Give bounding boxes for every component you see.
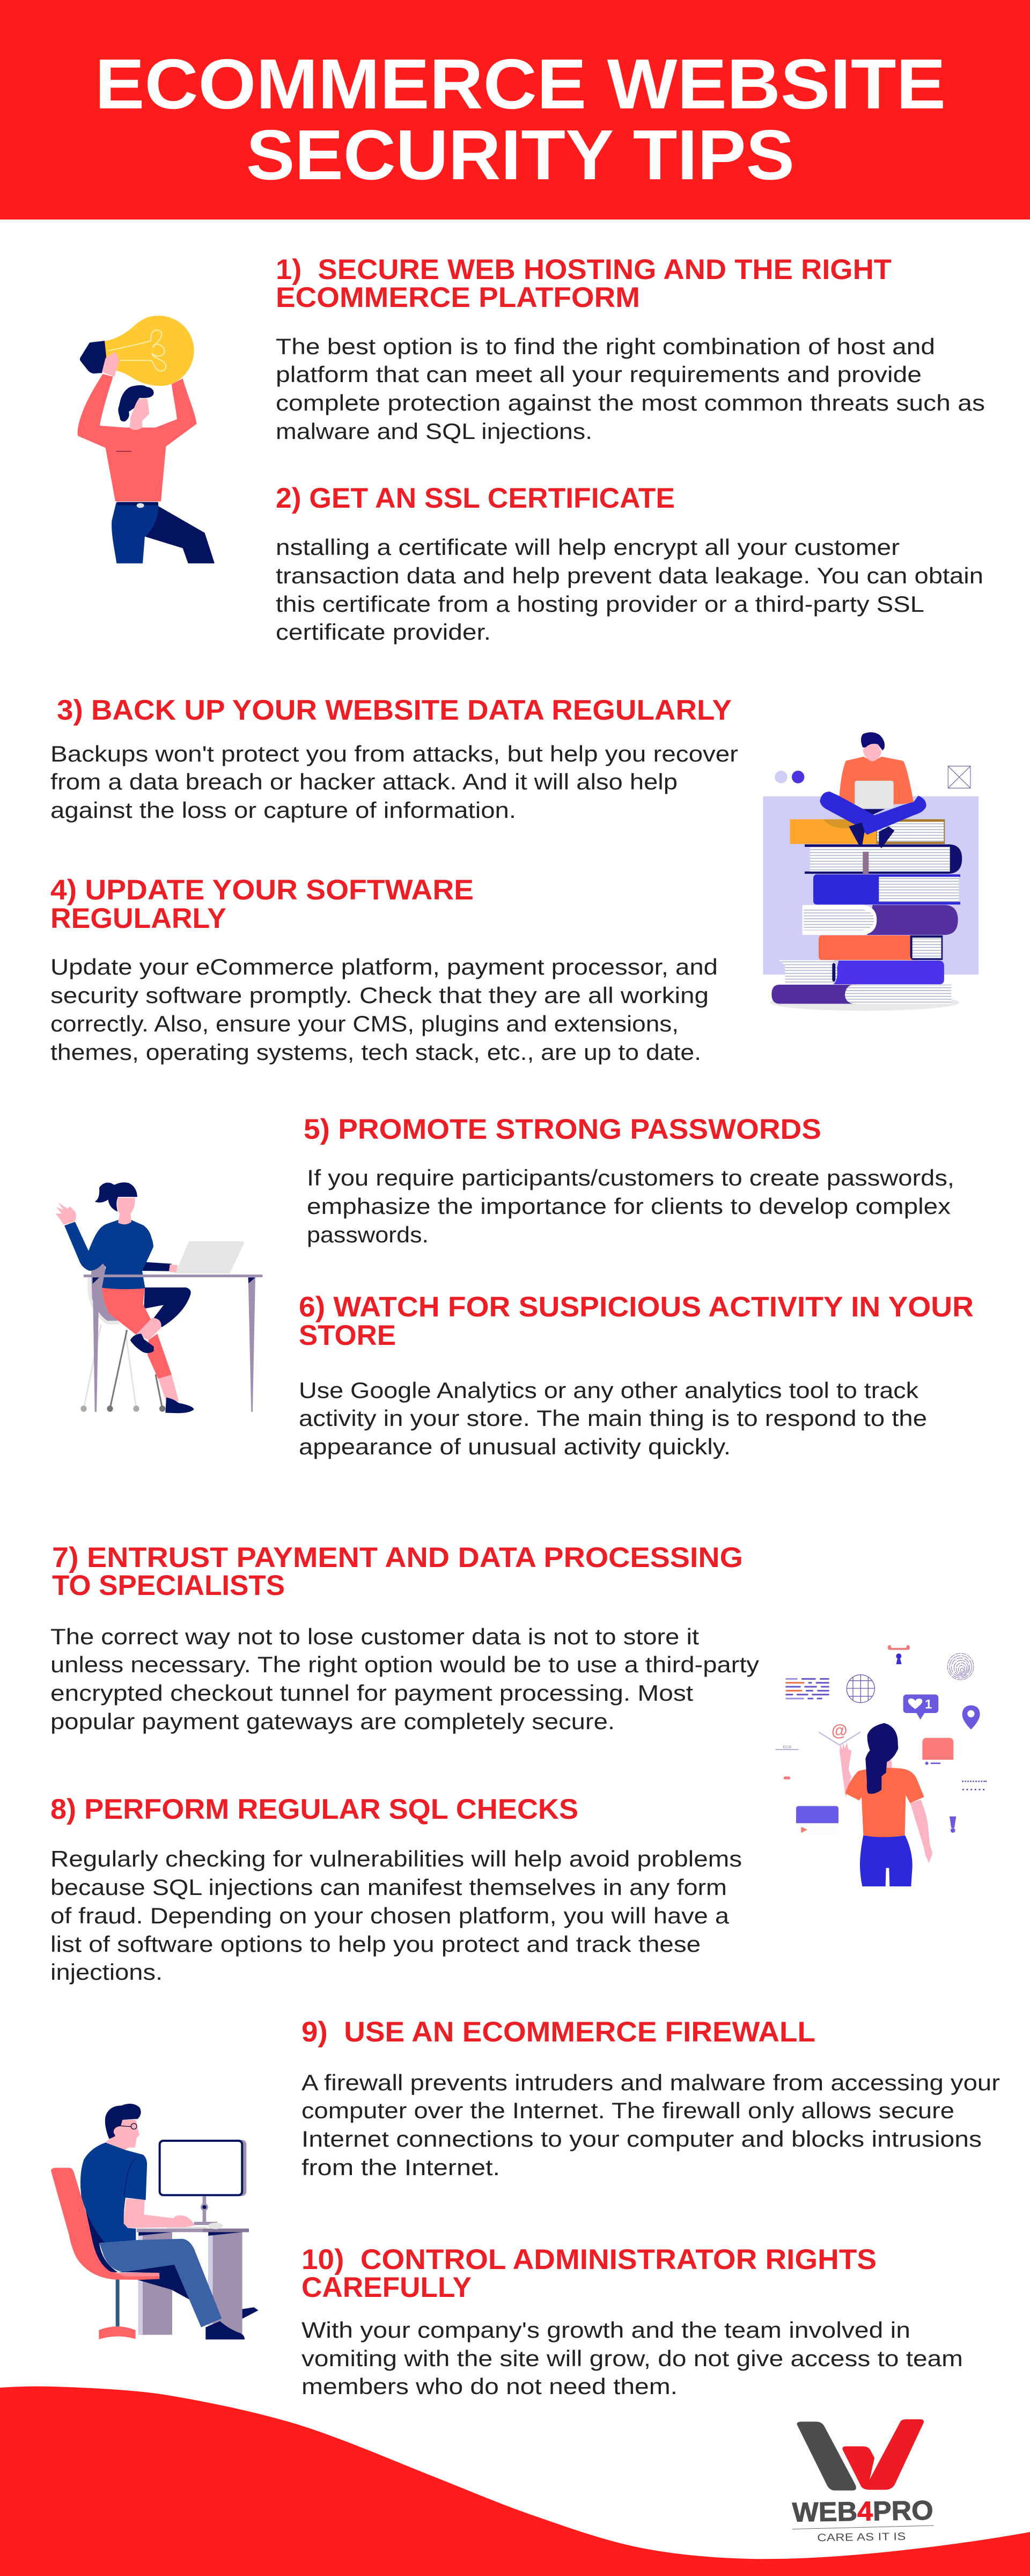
panel: tip 1 — [276, 254, 985, 444]
heading: tip 2: 2) GET AN SSL CERTIFICATE — [276, 482, 675, 514]
heading: tip 6 — [299, 1291, 974, 1351]
heading: tip 8: 8) PERFORM REGULAR SQL CHECKS — [50, 1794, 578, 1825]
panel: tip 4 — [50, 874, 718, 1065]
icon: password stars — [962, 1781, 987, 1790]
text: tip 4: themes, operating systems, tech stack, etc., are up to date. — [50, 1040, 701, 1065]
text: tip 1: malware and SQL injections. — [276, 419, 592, 444]
heading: tip 4: 4) UPDATE YOUR SOFTWARE — [50, 874, 474, 906]
icon: video card — [796, 1806, 838, 1836]
text: tip 8 — [50, 1846, 742, 1985]
text: tip 2 — [276, 535, 983, 645]
text: tip 4: correctly. Also, ensure your CMS, plugins and extensions, — [50, 1011, 679, 1036]
heading: tip 3: 3) BACK UP YOUR WEBSITE DATA REGULARLY — [57, 694, 732, 726]
text: tip 10: members who do not need them. — [301, 2374, 678, 2399]
logo wordmark: WEB4PRO — [792, 2495, 933, 2528]
icon: globe — [847, 1675, 874, 1703]
panel: tip 2 — [276, 482, 983, 645]
icon: fingerprint — [947, 1653, 974, 1680]
heading: tip 7: 7) ENTRUST PAYMENT AND DATA PROCESSING — [52, 1542, 743, 1574]
text: tip 6 — [299, 1378, 927, 1459]
logo tagline: CARE AS IT IS — [817, 2530, 906, 2544]
text: tip 3: from a data breach or hacker attack. And it will also help — [50, 769, 678, 794]
icon: like bubble: 1 — [925, 1697, 932, 1711]
text: tip 9: Internet connections to your computer and blocks intrusions — [301, 2126, 982, 2151]
text: tip 1: The best option is to find the right combination of host and — [276, 334, 935, 359]
text: tip 2: certificate provider. — [276, 619, 491, 645]
icon: exclamation mark — [950, 1817, 956, 1833]
text: tip 5: emphasize the importance for clients to develop complex — [307, 1194, 951, 1219]
text: tip 5 — [307, 1165, 954, 1247]
heading: tip 10: CAREFULLY — [301, 2272, 472, 2303]
heading: tip 5: 5) PROMOTE STRONG PASSWORDS — [304, 1114, 821, 1145]
text: tip 6: activity in your store. The main thing is to respond to the — [299, 1406, 927, 1431]
text: tip 8: because SQL injections can manifest themselves in any form — [50, 1875, 727, 1900]
icon: location pin — [962, 1706, 980, 1730]
text: tip 8: injections. — [50, 1959, 163, 1985]
text: tip 8: of fraud. Depending on your chosen platform, you will have a — [50, 1903, 730, 1928]
text: tip 1 — [276, 334, 985, 444]
text: tip 3: Backups won't protect you from attacks, but help you recover — [50, 741, 738, 766]
text: tip 10 — [301, 2317, 963, 2399]
text: tip 7 — [50, 1624, 759, 1734]
text: tip 7: encrypted checkout tunnel for payment processing. Most — [50, 1680, 693, 1706]
text: tip 10: vomiting with the site will grow, do not give access to team — [301, 2346, 963, 2371]
panel: tip 10 — [301, 2244, 963, 2399]
text: tip 3 — [50, 741, 738, 823]
icon: like bubble — [903, 1694, 938, 1719]
text: tip 2: nstalling a certificate will help encrypt all your customer — [276, 535, 900, 560]
illustration: man holding light bulb — [78, 316, 215, 564]
text: tip 4: security software promptly. Check that they are all working — [50, 983, 709, 1008]
figure: woman from behind — [840, 1723, 932, 1886]
text: tip 4: Update your eCommerce platform, payment processor, and — [50, 954, 718, 979]
text: tip 2: this certificate from a hosting provider or a third-party SSL — [276, 591, 924, 617]
heading: tip 9: 9) USE AN ECOMMERCE FIREWALL — [301, 2016, 815, 2048]
logo: WEB4PRO — [792, 2419, 933, 2544]
heading: tip 6: 6) WATCH FOR SUSPICIOUS ACTIVITY IN YOUR — [299, 1291, 974, 1323]
text: tip 1: complete protection against the most common threats such as — [276, 390, 985, 415]
text: tip 8: list of software options to help you protect and track these — [50, 1931, 701, 1957]
heading: tip 1: 1) SECURE WEB HOSTING AND THE RIGHT — [276, 254, 892, 286]
text: tip 7: popular payment gateways are completely secure. — [50, 1709, 615, 1734]
illustration: woman at desk with laptop — [55, 1182, 263, 1413]
heading: tip 7: TO SPECIALISTS — [52, 1570, 285, 1601]
illustration: woman among digital icons — [776, 1645, 987, 1886]
text: tip 2: transaction data and help prevent data leakage. You can obtain — [276, 563, 983, 588]
text: tip 7: unless necessary. The right option would be to use a third-party — [50, 1652, 759, 1677]
header banner — [0, 0, 1030, 219]
text: tip 8: Regularly checking for vulnerabilities will help avoid problems — [50, 1846, 742, 1871]
panel: tip 5 — [304, 1114, 954, 1247]
footer red wave — [0, 2387, 1030, 2576]
text: tip 9: A firewall prevents intruders and malware from accessing your — [301, 2070, 1000, 2095]
illustration: man at computer — [51, 2104, 259, 2339]
panel: tip 6 — [299, 1291, 974, 1459]
icon: coral card — [922, 1738, 953, 1765]
text: tip 9 — [301, 2070, 1000, 2180]
logo mark — [797, 2419, 924, 2491]
text: tip 6: Use Google Analytics or any other analytics tool to track — [299, 1378, 919, 1403]
icon: code lines — [786, 1679, 828, 1699]
text: tip 7: The correct way not to lose customer data is not to store it — [50, 1624, 699, 1649]
icon: email envelope: @ — [832, 1722, 848, 1740]
text: tip 1: platform that can meet all your requirements and provide — [276, 362, 922, 387]
panel: tip 3 — [50, 694, 738, 823]
heading: tip 10 — [301, 2244, 877, 2303]
text: tip 3: against the loss or capture of information. — [50, 797, 516, 823]
heading: tip 4 — [50, 874, 474, 934]
panel: tip 7 — [50, 1542, 759, 1734]
title: ECOMMERCE WEBSITE — [95, 45, 946, 123]
heading: tip 4: REGULARLY — [50, 903, 226, 934]
text: tip 5: passwords. — [307, 1222, 429, 1247]
icon: keyhole — [888, 1645, 910, 1664]
text: tip 6: appearance of unusual activity quickly. — [299, 1434, 731, 1459]
heading: tip 1: ECOMMERCE PLATFORM — [276, 282, 640, 313]
text: tip 9: computer over the Internet. The firewall only allows secure — [301, 2098, 954, 2123]
text: tip 5: If you require participants/customers to create passwords, — [307, 1165, 954, 1190]
text: tip 4 — [50, 954, 718, 1065]
panel: tip 8 — [50, 1794, 742, 1985]
panel: tip 9 — [301, 2016, 1000, 2180]
title — [95, 45, 946, 194]
text: tip 10: With your company's growth and the team involved in — [301, 2317, 910, 2343]
title: SECURITY TIPS — [246, 115, 794, 194]
heading: tip 6: STORE — [299, 1320, 396, 1351]
icon: email envelope — [819, 1722, 860, 1745]
heading: tip 1 — [276, 254, 892, 313]
illustration: person on stack of books — [763, 732, 979, 1011]
text: tip 9: from the Internet. — [301, 2155, 500, 2180]
heading: tip 10: 10) CONTROL ADMINISTRATOR RIGHTS — [301, 2244, 877, 2275]
heading: tip 7 — [52, 1542, 743, 1601]
